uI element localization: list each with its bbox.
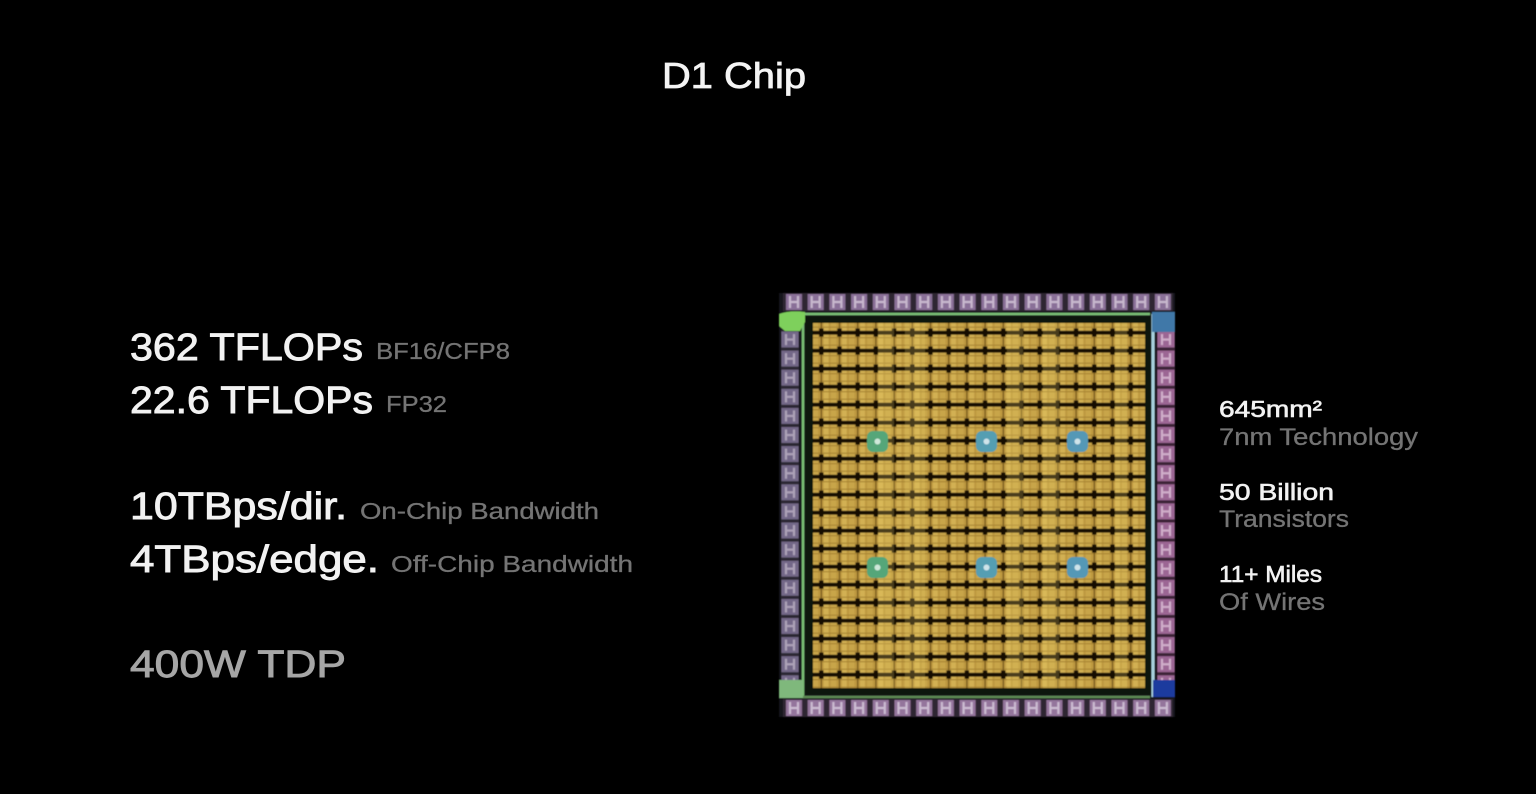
bottom pad row [783,699,1173,717]
spec: on-chip bandwidth: 10TBps/dir. [130,486,347,528]
fact: transistors: Transistors [1219,506,1349,533]
fact: die area: 7nm Technology [1219,424,1418,451]
left pad column [781,330,799,680]
spec: FP32 compute: 22.6 TFLOPs [130,380,373,422]
spec: BF16/CFP8 compute: 362 TFLOPs [130,327,363,369]
dark frame around core [805,316,1151,695]
spec: on-chip bandwidth: On-Chip Bandwidth [360,498,599,524]
corner block: bottom left [779,680,803,698]
chip die image [779,293,1175,717]
top pad row [783,293,1173,311]
spec: BF16/CFP8 compute: BF16/CFP8 [376,338,510,364]
corner block: bottom right [1153,680,1175,697]
fact: transistors: 50 Billion [1219,479,1334,505]
corner block: top left [779,311,805,331]
fact: die area: 645mm² [1219,396,1322,422]
spec: off-chip bandwidth [130,539,633,581]
core tile array [813,323,1145,688]
title: D1 Chip [662,55,806,96]
panel: performance specs [130,327,633,686]
corner block: top right [1152,312,1175,332]
column brightness bands [878,323,1127,688]
spec: on-chip bandwidth [130,486,599,528]
blue border trace [1152,314,1154,697]
spec: off-chip bandwidth: Off-Chip Bandwidth [391,551,633,577]
right pad column [1157,330,1175,680]
spec: FP32 compute: FP32 [386,391,447,417]
panel: chip facts [1219,396,1418,616]
fact: wires: Of Wires [1219,589,1325,616]
green border traces [803,314,1150,698]
fact: wires [1219,561,1325,616]
fact: die area [1219,396,1418,451]
green and blue nodes [867,431,1088,578]
fact: transistors [1219,479,1349,533]
spec: thermal design power: 400W TDP [130,644,346,686]
spec: off-chip bandwidth: 4TBps/edge. [130,539,379,581]
spec: BF16/CFP8 compute [130,327,510,369]
fact: wires: 11+ Miles [1219,561,1322,587]
